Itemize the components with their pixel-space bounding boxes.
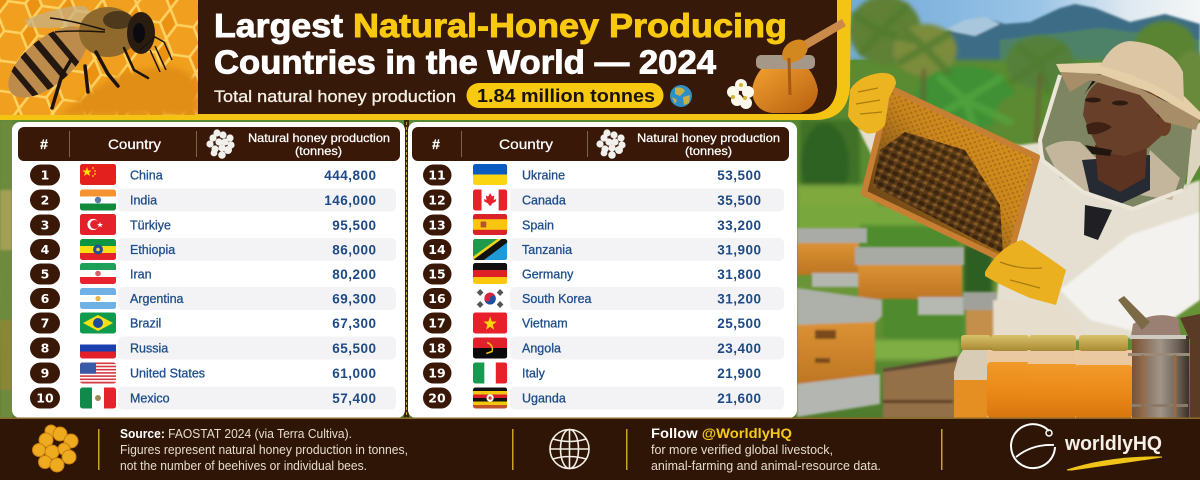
gold banner edge	[0, 0, 851, 120]
brown banner background	[197, 0, 837, 114]
icon: honey jar with dipper	[752, 19, 846, 113]
production values 11-20: 53,500	[717, 168, 762, 183]
flags 1-10	[80, 164, 116, 408]
rank numbers 11-20: 11	[428, 168, 446, 182]
production values 11-20: 31,200	[717, 292, 762, 306]
flag: Canada	[473, 190, 507, 210]
production values 1-10: 80,200	[332, 267, 376, 282]
flag: China	[80, 164, 116, 185]
production values 1-10: 57,400	[332, 391, 376, 406]
flag: Spain	[473, 214, 507, 235]
flag: South Korea	[473, 288, 507, 309]
icon: honeycomb	[32, 425, 78, 472]
title: Natural-Honey Producing	[353, 7, 787, 44]
row stripes	[510, 188, 784, 410]
hive large front	[797, 288, 882, 417]
table header left	[18, 127, 400, 161]
country names 11-20: Angola	[522, 342, 561, 356]
country names 11-20: Germany	[522, 268, 574, 282]
jar 4	[1075, 335, 1132, 418]
rank numbers 1-10: 7	[41, 316, 49, 330]
country names 11-20: Canada	[522, 194, 566, 208]
country names 1-10: Argentina	[130, 292, 184, 306]
rank numbers 1-10: 5	[41, 266, 49, 282]
beehives	[797, 228, 997, 418]
rank numbers 1-10: 6	[41, 291, 50, 306]
beekeeper	[848, 41, 1200, 340]
rank numbers 11-20: 18	[428, 340, 446, 356]
small jar	[954, 335, 991, 418]
total pill: 1.84 million tonnes	[477, 86, 655, 106]
rank numbers 11-20: 14	[428, 242, 446, 257]
table header right: Country	[499, 136, 553, 152]
veil hem band	[1040, 75, 1183, 209]
mountains	[930, 4, 1200, 80]
flag: Ukraine	[473, 164, 507, 185]
country names 1-10: Mexico	[130, 392, 170, 406]
footer	[0, 418, 1200, 480]
production values 1-10: 95,500	[332, 218, 376, 233]
rank numbers 11-20: 13	[428, 218, 446, 232]
country names 11-20: Tanzania	[522, 243, 572, 257]
country names 11-20: Ukraine	[522, 168, 565, 182]
row stripes	[118, 188, 396, 410]
icon: globe	[670, 85, 692, 107]
flag: Uganda	[473, 388, 507, 408]
production values 1-10: 86,000	[332, 242, 376, 258]
production values 11-20: 23,400	[717, 341, 762, 356]
flag: Brazil	[80, 312, 116, 334]
shirt and neck	[1082, 155, 1150, 205]
bee thorax	[79, 7, 137, 57]
smoker	[1118, 296, 1200, 418]
production values 11-20: 35,500	[717, 193, 762, 208]
bee head	[127, 12, 155, 54]
rank numbers 11-20: 16	[428, 291, 446, 306]
rank badges 1-10	[30, 164, 60, 408]
table header left: #	[40, 136, 48, 152]
bee abdomen	[8, 26, 86, 98]
flag: Türkiye	[80, 214, 116, 235]
rank numbers 1-10: 2	[41, 192, 49, 208]
hive back left	[797, 228, 867, 287]
rank numbers 1-10	[36, 168, 54, 406]
rank numbers 11-20: 12	[428, 192, 446, 208]
flags 11-20	[473, 164, 508, 408]
logo: worldlyHQ	[1011, 424, 1162, 470]
flag: Mexico	[80, 388, 116, 408]
production values 1-10	[324, 168, 376, 406]
rank numbers 1-10: 4	[41, 242, 50, 257]
title banner	[0, 0, 851, 120]
lower glove	[985, 240, 1066, 305]
foliage and palm trees	[797, 0, 1200, 360]
country names 1-10: Türkiye	[130, 218, 171, 232]
country names 11-20: Italy	[522, 366, 546, 380]
honey comb highlight	[60, 67, 198, 115]
glass backing	[987, 350, 1132, 380]
follow text: Follow @WorldlyHQ	[651, 425, 792, 441]
table header left: (tonnes)	[295, 144, 342, 158]
jar 3	[1026, 335, 1078, 418]
crate	[883, 356, 958, 418]
rank numbers 1-10: 8	[41, 340, 49, 356]
country names 11-20: Uganda	[522, 392, 566, 406]
icon: honeycomb cells	[206, 129, 235, 159]
production values 11-20: 33,200	[717, 218, 762, 233]
hat	[1056, 41, 1200, 130]
follow text: for more verified global livestock,	[651, 443, 833, 457]
total pill	[466, 83, 664, 108]
rank numbers 1-10: 10	[36, 390, 54, 406]
flag: Italy	[473, 362, 507, 384]
table header right	[412, 127, 789, 161]
face	[1083, 68, 1171, 156]
flag: Tanzania	[473, 239, 508, 260]
flag: Ethiopia	[80, 239, 116, 260]
icon: globe outline	[550, 430, 589, 468]
suit	[858, 128, 1200, 340]
production values 11-20: 31,900	[717, 242, 762, 258]
rank numbers 11-20: 17	[428, 316, 446, 330]
country names 1-10: Iran	[130, 268, 152, 282]
country names 1-10: Ethiopia	[130, 243, 175, 257]
honey jars	[954, 335, 1132, 418]
source text: not the number of beehives or individual bees.	[120, 459, 367, 473]
rank numbers 11-20	[428, 168, 446, 406]
country names 11-20: Vietnam	[522, 316, 568, 330]
flag: Vietnam	[473, 312, 507, 334]
table panel left	[12, 122, 405, 418]
table panel right	[408, 122, 797, 418]
source text: Source: FAOSTAT 2024 (via Terra Cultiva).	[120, 427, 352, 441]
production values 1-10: 444,800	[324, 168, 376, 183]
production values 11-20: 25,500	[717, 316, 762, 331]
flag: Argentina	[80, 288, 116, 309]
title: Largest	[214, 7, 343, 44]
palm fronds	[855, 8, 1062, 145]
logo: worldlyHQ: worldlyHQ	[1064, 433, 1162, 455]
table header right: #	[432, 136, 440, 152]
bee legs	[52, 48, 148, 108]
production values 11-20: 21,900	[717, 366, 762, 381]
follow text: animal-farming and animal-resource data.	[651, 459, 881, 473]
bee photo	[0, 0, 198, 115]
source text: Figures represent natural honey production in tonnes,	[120, 443, 408, 457]
rank numbers 11-20: 15	[428, 266, 446, 282]
country names 1-10: Russia	[130, 342, 168, 356]
hive centre	[855, 247, 964, 315]
table header right: Natural honey production	[637, 131, 780, 145]
flag: Iran	[80, 263, 116, 284]
country names 1-10: India	[130, 194, 157, 208]
production values 11-20: 21,600	[717, 391, 762, 406]
title: Countries in the World — 2024	[214, 44, 717, 80]
flag: Germany	[473, 263, 507, 284]
rank numbers 1-10: 1	[41, 168, 49, 182]
flag: United States	[80, 362, 116, 384]
collar of suit under veil	[1045, 141, 1180, 200]
panel divider	[404, 120, 409, 418]
production values 1-10: 146,000	[324, 193, 376, 208]
hive right	[963, 292, 997, 338]
rank numbers 11-20: 20	[428, 390, 446, 406]
rank numbers 11-20: 19	[428, 366, 446, 380]
production values 1-10: 65,500	[332, 341, 376, 356]
jar 2	[987, 335, 1032, 418]
country names 11-20	[522, 168, 592, 406]
table header left: Natural honey production	[248, 131, 390, 145]
country names 11-20: South Korea	[522, 292, 592, 306]
source text	[120, 427, 408, 473]
icon: honeycomb cells	[596, 129, 626, 159]
follow text	[651, 425, 881, 473]
rank numbers 1-10: 9	[41, 366, 49, 380]
production values 11-20	[717, 168, 762, 406]
country names 1-10: China	[130, 168, 163, 182]
country names 1-10	[130, 168, 205, 406]
country names 1-10: Brazil	[130, 316, 161, 330]
production values 1-10: 69,300	[332, 292, 376, 306]
table header left: Country	[108, 136, 161, 152]
rank badges 11-20	[423, 164, 452, 408]
country names 1-10: United States	[130, 366, 205, 380]
rank numbers 1-10: 3	[41, 218, 49, 232]
sky	[840, 0, 1200, 60]
flag: Russia	[80, 344, 116, 358]
table header right: (tonnes)	[685, 144, 732, 158]
production values 11-20: 31,800	[717, 267, 762, 282]
country names 11-20: Spain	[522, 218, 554, 232]
subtitle: Total natural honey production	[214, 87, 456, 106]
veil interior	[1040, 72, 1198, 207]
right veil side	[1186, 122, 1200, 190]
production values 1-10: 61,000	[332, 366, 376, 381]
icon: flowers	[727, 79, 754, 109]
flag: Angola	[473, 338, 507, 358]
left foliage strip	[0, 120, 13, 420]
wings	[25, 6, 90, 28]
honeycomb frame	[864, 88, 1037, 262]
production values 1-10: 67,300	[332, 316, 376, 331]
title	[214, 7, 787, 80]
flag: India	[80, 190, 116, 210]
upper glove	[848, 73, 896, 134]
